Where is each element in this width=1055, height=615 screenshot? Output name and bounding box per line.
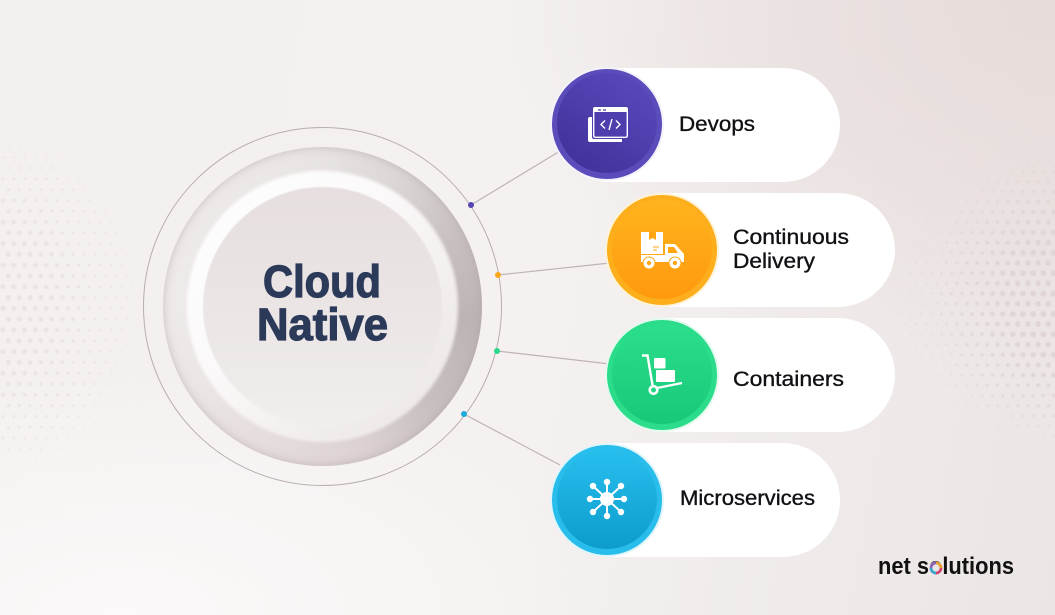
- circle badge: Continuous Delivery: [607, 195, 717, 305]
- pill: Devops: [552, 68, 840, 182]
- logo: net solutions: net solutions: [878, 553, 1014, 580]
- title: Cloud: [263, 256, 381, 307]
- pill: Continuous Delivery: [607, 193, 895, 307]
- title: [257, 256, 388, 350]
- connector dot: devops: [468, 202, 474, 208]
- inner plate: [203, 187, 442, 426]
- label: Microservices: [680, 487, 815, 510]
- icon: code window: [588, 107, 628, 142]
- connector dot: containers: [494, 348, 500, 354]
- connector dot: microservices: [461, 411, 467, 417]
- white bevel ring: [187, 171, 458, 442]
- circle badge: Containers: [607, 320, 717, 430]
- pill: Microservices: [552, 443, 840, 557]
- outer ring: [143, 127, 502, 486]
- label: Devops: [679, 113, 755, 136]
- connector dot: continuous delivery: [495, 272, 501, 278]
- label: Delivery: [733, 250, 816, 273]
- label: [733, 226, 849, 273]
- icon: delivery truck: [641, 232, 684, 268]
- label: Containers: [733, 368, 844, 391]
- circle badge: Microservices: [552, 445, 662, 555]
- icon: hub network: [586, 478, 628, 520]
- label: Continuous: [733, 226, 849, 249]
- central disc: Cloud Native: [163, 147, 482, 466]
- circle badge: Devops: [552, 69, 662, 179]
- title: Native: [257, 299, 388, 350]
- icon: hand trolley: [642, 354, 682, 396]
- pill: Containers: [607, 318, 895, 432]
